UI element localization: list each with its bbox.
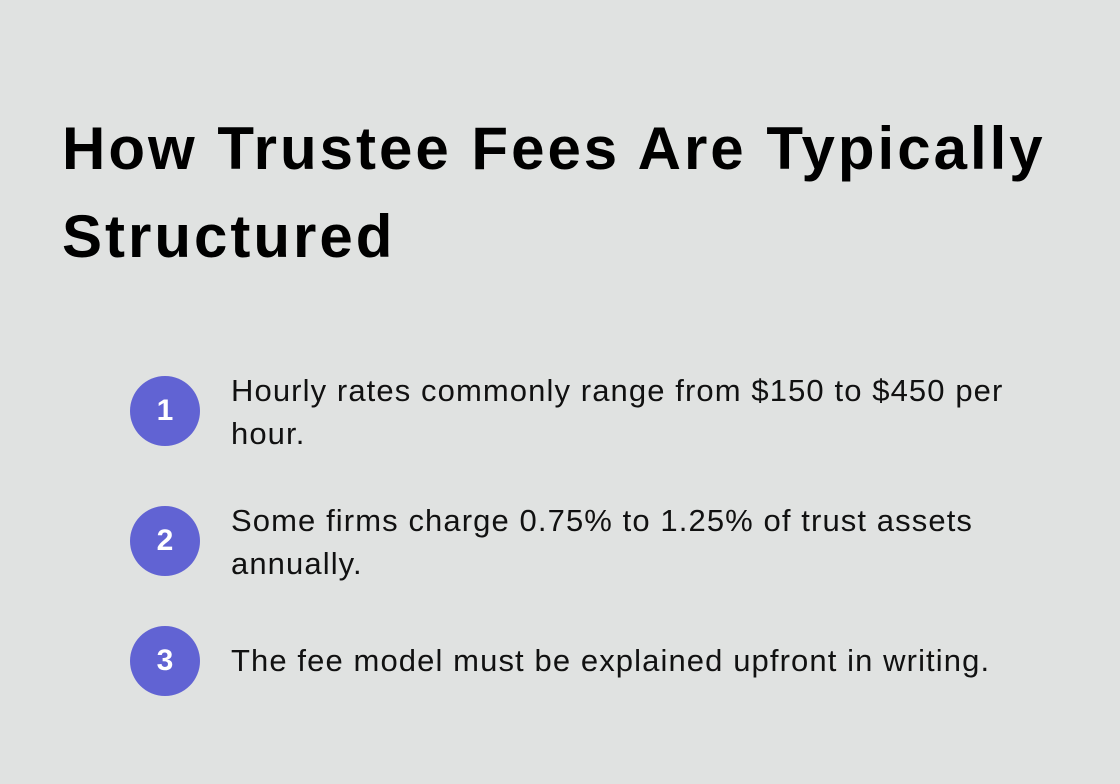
item 3 xyxy=(130,626,990,696)
text 2 xyxy=(231,503,973,581)
icon: number 1 xyxy=(130,376,200,446)
icon: number 1: 1 xyxy=(157,394,173,427)
title xyxy=(62,115,1046,270)
item 1 xyxy=(130,373,1003,451)
title: How Trustee Fees Are Typically xyxy=(62,115,1046,182)
icon: number 2: 2 xyxy=(157,524,173,557)
text 1 xyxy=(231,373,1003,451)
item 2 xyxy=(130,503,973,581)
title: Structured xyxy=(62,203,395,270)
icon: number 2 xyxy=(130,506,200,576)
text 2: Some firms charge 0.75% to 1.25% of trust assets xyxy=(231,503,973,538)
text 3: The fee model must be explained upfront in writing. xyxy=(231,643,990,678)
text 1: hour. xyxy=(231,416,305,451)
text 2: annually. xyxy=(231,546,363,581)
text 1: Hourly rates commonly range from $150 to $450 per xyxy=(231,373,1003,408)
icon: number 3: 3 xyxy=(157,644,173,677)
icon: number 3 xyxy=(130,626,200,696)
